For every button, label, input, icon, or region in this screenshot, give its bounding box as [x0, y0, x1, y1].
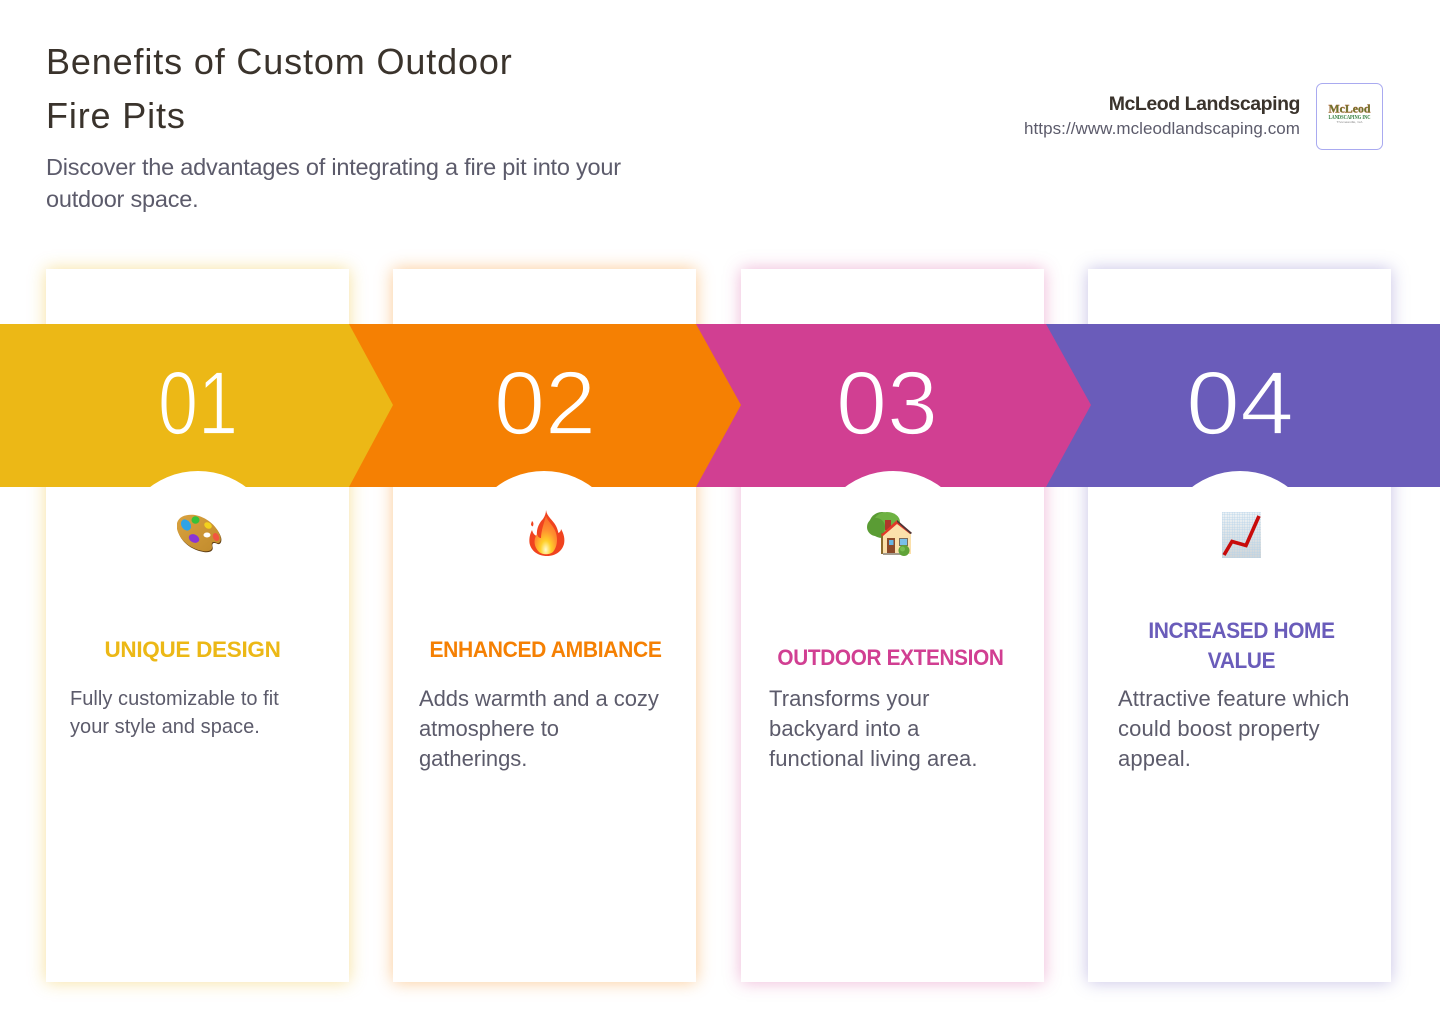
heading: VALUE — [1208, 648, 1275, 673]
heading — [1148, 618, 1335, 673]
description — [419, 686, 659, 771]
icon backdrop circle — [118, 471, 278, 631]
heading: UNIQUE DESIGN — [104, 637, 281, 662]
icon backdrop circle — [813, 471, 973, 631]
description: Attractive feature which — [1118, 686, 1350, 711]
heading: OUTDOOR EXTENSION — [777, 645, 1004, 670]
arrow band with step numbers — [0, 324, 1440, 487]
description — [70, 688, 279, 738]
arrow 02 — [349, 324, 741, 487]
description: gatherings. — [419, 746, 527, 771]
arrow 03: 03 — [836, 354, 938, 454]
icon: artist palette — [177, 514, 222, 552]
title: Fire Pits — [46, 95, 186, 136]
brand name: McLeod Landscaping — [1109, 93, 1300, 115]
title: Benefits of Custom Outdoor — [46, 41, 513, 82]
arrow 01: 01 — [158, 354, 238, 454]
icon backdrop circle — [1160, 471, 1320, 631]
title — [46, 41, 513, 136]
description: Transforms your — [769, 686, 930, 711]
subtitle — [46, 154, 621, 212]
description — [769, 686, 978, 771]
description: your style and space. — [70, 716, 260, 738]
brand url: https://www.mcleodlandscaping.com — [1024, 119, 1300, 138]
description: functional living area. — [769, 746, 978, 771]
description: appeal. — [1118, 746, 1191, 771]
subtitle: outdoor space. — [46, 186, 198, 212]
logo — [1316, 83, 1383, 150]
arrow 04: 04 — [1186, 354, 1294, 454]
description: backyard into a — [769, 716, 919, 741]
logo: McLeod — [1328, 104, 1371, 116]
arrow 03 — [696, 324, 1091, 487]
description: atmosphere to — [419, 716, 559, 741]
panel: enhanced ambiance — [393, 269, 696, 982]
logo: Thomasville, GA — [1336, 120, 1363, 124]
heading: ENHANCED AMBIANCE — [429, 637, 662, 662]
icon: fire — [529, 510, 564, 556]
subtitle: Discover the advantages of integrating a fire pit into your — [46, 154, 621, 180]
panel: outdoor extension — [741, 269, 1044, 982]
description: could boost property — [1118, 716, 1320, 741]
panel: increased home value — [1088, 269, 1391, 982]
arrow 02: 02 — [494, 354, 596, 454]
icon: rising chart — [1222, 512, 1261, 558]
heading: INCREASED HOME — [1148, 618, 1335, 643]
description: Adds warmth and a cozy — [419, 686, 659, 711]
arrow 01 — [0, 324, 393, 487]
panel: unique design — [46, 269, 349, 982]
description — [1118, 686, 1350, 771]
description: Fully customizable to fit — [70, 688, 279, 710]
icon backdrop circle — [464, 471, 624, 631]
icon: house with garden — [867, 512, 912, 556]
arrow 04 — [1046, 324, 1440, 487]
